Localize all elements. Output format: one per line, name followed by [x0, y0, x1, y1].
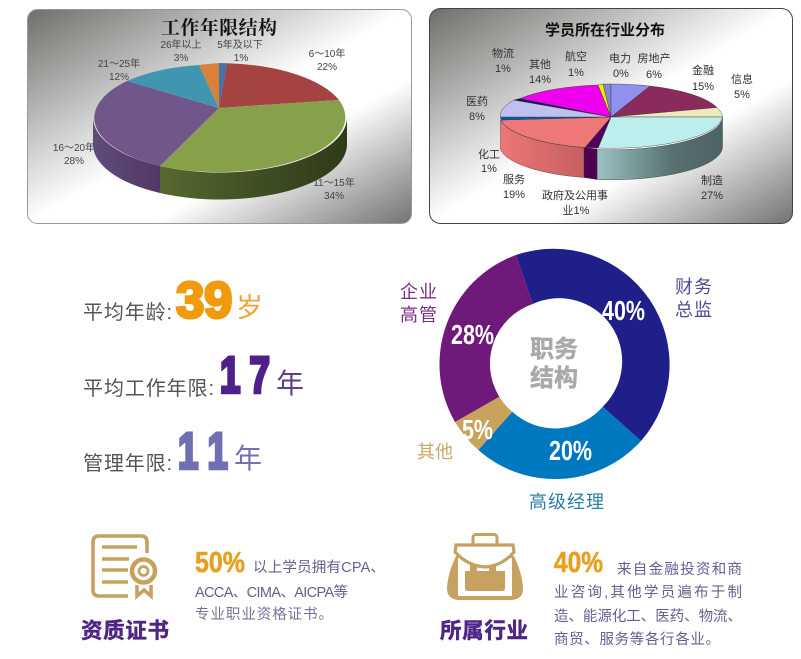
- pie labels: industry distribution: 信息: [731, 72, 753, 86]
- pie labels: industry distribution: 电力: [609, 52, 631, 65]
- text block: industry: [554, 547, 742, 648]
- stat: average age: 岁: [236, 293, 263, 323]
- pie labels: industry distribution: 19%: [503, 189, 525, 201]
- pie labels: industry distribution: 0%: [613, 68, 629, 80]
- stat: management years: 11: [178, 424, 228, 480]
- donut centre title: 职务: [530, 336, 578, 363]
- text block: qualifications: 专业职业资格证书。: [195, 606, 333, 623]
- stat: average age: [83, 272, 263, 328]
- pie labels: work years: [53, 38, 355, 202]
- pie labels: work years: 5年及以下: [217, 38, 263, 51]
- pie labels: industry distribution: 5%: [734, 89, 750, 101]
- panel: work years pie chart: [28, 10, 412, 224]
- heading: qualifications: 资质证书: [81, 619, 169, 643]
- stat: average working years: 17: [220, 348, 270, 404]
- donut chart: position structure: [439, 249, 670, 479]
- text block: industry: 来自金融投资和商: [617, 561, 742, 578]
- pie labels: industry distribution: 物流: [492, 46, 514, 60]
- percentage labels: 28%: [451, 319, 494, 350]
- text block: qualifications: 50%: [195, 547, 245, 579]
- donut label: executive: 企业: [400, 282, 437, 302]
- pie labels: industry distribution: [466, 46, 753, 217]
- pie labels: work years: 1%: [234, 53, 248, 64]
- text block: qualifications: 以上学员拥有CPA、: [253, 559, 385, 576]
- chart title: work years: 工作年限结构: [161, 16, 277, 39]
- pie labels: industry distribution: 金融: [692, 63, 714, 77]
- pie labels: work years: 3%: [174, 53, 188, 64]
- pie labels: industry distribution: 房地产: [638, 51, 670, 65]
- percentage labels: 5%: [462, 414, 493, 445]
- donut label: senior manager: 高级经理: [529, 492, 604, 512]
- stat: management years: 年: [234, 443, 262, 474]
- chart title: industry distribution: 学员所在行业分布: [545, 21, 665, 39]
- 3D pie: industry distribution: [500, 84, 722, 180]
- stat: average age: 39: [176, 272, 232, 328]
- pie labels: work years: 6～10年: [309, 47, 345, 60]
- pie labels: work years: 21～25年: [98, 57, 140, 70]
- pie labels: industry distribution: 8%: [469, 111, 485, 123]
- text block: qualifications: [195, 547, 385, 623]
- pie labels: industry distribution: 业1%: [563, 204, 590, 217]
- pie labels: industry distribution: 27%: [701, 190, 723, 202]
- pie labels: industry distribution: 政府及公用事: [542, 188, 608, 202]
- pie labels: industry distribution: 制造: [701, 173, 723, 187]
- pie labels: work years: 12%: [109, 72, 129, 83]
- donut centre title: 结构: [530, 365, 578, 392]
- pie labels: work years: 22%: [317, 62, 337, 73]
- pie labels: work years: 34%: [324, 191, 344, 202]
- panel: industry distribution pie chart: [430, 8, 792, 224]
- pie labels: industry distribution: 1%: [495, 63, 511, 75]
- stat: average working years: 平均工作年限:: [83, 377, 214, 400]
- pie labels: work years: 28%: [64, 156, 84, 167]
- stat: average working years: [83, 348, 304, 404]
- stat: management years: 管理年限:: [83, 452, 172, 475]
- icon: certificate: [93, 536, 155, 596]
- donut label: other: 其他: [417, 442, 453, 462]
- segment: other 5%: [455, 397, 512, 450]
- text block: industry: 造、能源化工、医药、物流、: [554, 608, 742, 625]
- segment: finance director 40%: [516, 249, 670, 441]
- pie labels: work years: 16～20年: [53, 141, 95, 154]
- icon: briefcase: [447, 534, 523, 600]
- text block: industry: 40%: [554, 547, 603, 579]
- donut label: executive: 高管: [400, 305, 437, 325]
- stat: average age: 平均年龄:: [83, 301, 172, 324]
- text block: industry: 商贸、服务等各行各业。: [554, 630, 720, 648]
- donut centre title: [530, 336, 578, 392]
- segment: executive 28%: [439, 255, 533, 422]
- pie labels: industry distribution: 15%: [692, 81, 714, 93]
- text block: industry: 业咨询,其他学员遍布于制: [554, 584, 742, 601]
- stat: average working years: 年: [276, 368, 304, 399]
- percentage labels: 20%: [549, 435, 592, 466]
- pie labels: industry distribution: 化工: [478, 147, 500, 161]
- pie labels: industry distribution: 服务: [503, 173, 525, 186]
- percentage labels: 40%: [602, 295, 645, 326]
- pie labels: industry distribution: 14%: [529, 74, 551, 86]
- pie labels: industry distribution: 其他: [529, 58, 551, 71]
- donut label: finance director: 财务: [675, 277, 712, 297]
- segment: senior manager 20%: [478, 407, 641, 479]
- pie labels: industry distribution: 医药: [466, 95, 488, 108]
- 3D pie: work years: [93, 63, 347, 200]
- pie labels: industry distribution: 1%: [568, 67, 584, 79]
- pie labels: industry distribution: 1%: [481, 163, 497, 175]
- heading: industry: 所属行业: [440, 619, 528, 643]
- donut label: finance director: 总监: [675, 300, 712, 320]
- pie labels: industry distribution: 航空: [565, 49, 587, 63]
- pie labels: work years: 11～15年: [313, 176, 355, 189]
- stat: management years: [83, 424, 262, 480]
- pie labels: work years: 26年以上: [160, 38, 202, 51]
- donut label: finance director: [675, 277, 712, 320]
- percentage labels: [451, 295, 645, 466]
- donut label: executive: [400, 282, 437, 325]
- text block: qualifications: ACCA、CIMA、AICPA等: [195, 583, 348, 601]
- pie labels: industry distribution: 6%: [646, 69, 662, 81]
